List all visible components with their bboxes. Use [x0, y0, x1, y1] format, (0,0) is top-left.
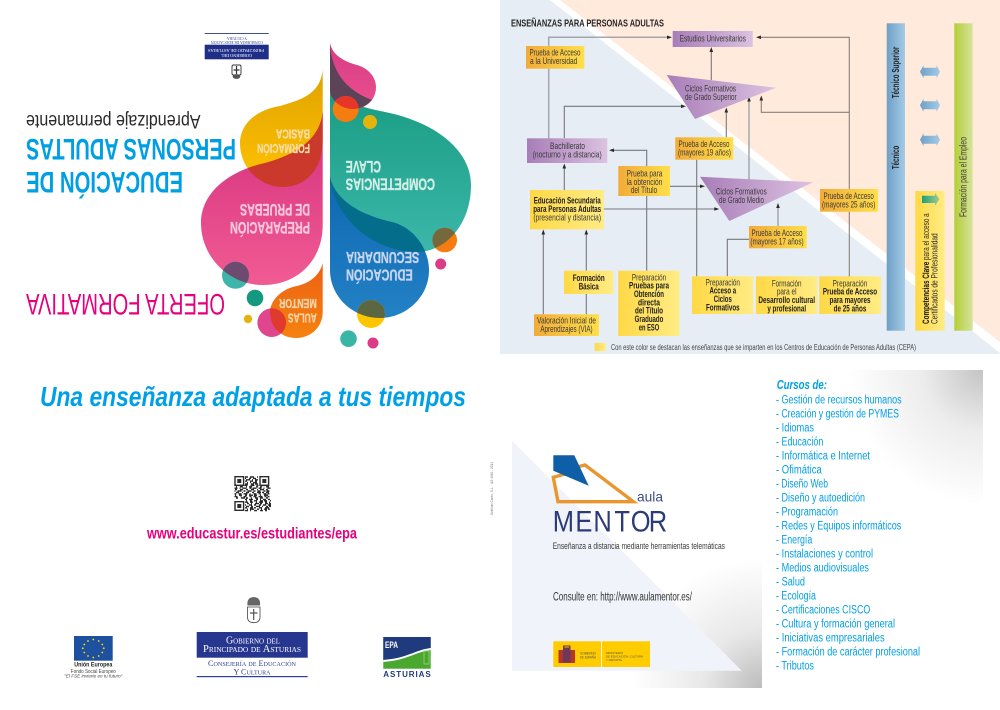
logo: gobierno del principado upside down: GOBIERNO DEL: [221, 53, 252, 58]
course list: - Certificaciones CISCO: [776, 604, 870, 616]
box: estudios universitarios: Estudios Universitarios: [680, 34, 746, 44]
drop: aulas mentor: AULAS: [288, 310, 317, 326]
course list: - Educación: [776, 437, 823, 449]
course list: - Idiomas: [776, 423, 814, 435]
drop: educación secundaria: [330, 177, 429, 318]
box: preparación prueba de acceso mayores 25: para mayores: [830, 295, 870, 306]
box: preparación prueba de acceso mayores 25: de 25 años: [834, 303, 866, 314]
box: formación básica: Básica: [579, 282, 599, 292]
logo: aula mentor: [553, 455, 667, 538]
box: educación secundaria: Educación Secundaria: [534, 196, 601, 207]
drop: educación secundaria: SECUNDARIA: [346, 248, 419, 265]
box: competencias clave: [915, 191, 945, 331]
course list: - Creación y gestión de PYMES: [776, 409, 899, 421]
box: formación para el desarrollo cultural: y profesional: [767, 303, 806, 314]
logo: unión europea: Fondo Social Europeo: [71, 669, 116, 675]
logo: aula mentor: MENTOR: [553, 505, 667, 538]
website: Consulte en: http://www.aulamentor.es/: [553, 592, 693, 604]
diagram background: [500, 0, 1000, 354]
shape: ciclos formativos de grado superior: Ciclos Formativos: [685, 84, 736, 95]
box: valoración inicial: Valoración Inicial de: [537, 316, 596, 326]
label: formación básica: BÁSICA: [276, 126, 310, 142]
box: formación básica: [564, 271, 613, 294]
legal deposit note: Gráficas Careo, S.L. · AS 4062 - 2014: [489, 461, 494, 515]
box: educación secundaria: (presencial y distancia): [533, 212, 601, 223]
label: formación básica: FORMACIÓN: [257, 141, 310, 156]
course list: - Diseño y autoedición: [776, 493, 865, 505]
logo: gobierno del principado upside down: CONSEJERÍA DE EDUCACIÓN: [211, 40, 263, 45]
panel: back cover: [40, 381, 466, 679]
bar: técnico: Técnico Superior: [891, 47, 902, 98]
logo: epa asturias: [383, 637, 431, 679]
drop: competencias clave: COMPETENCIAS: [346, 174, 435, 194]
course list: - Formación de carácter profesional: [776, 646, 920, 658]
grey corner shading bottom: [630, 558, 762, 688]
logo: gobierno del principado de asturias: Consejería de Educación: [208, 659, 297, 668]
box: preparación pruebas obtención directa: Graduado: [635, 314, 663, 325]
heading: enseñanzas: ENSEÑANZAS PARA PERSONAS ADULTAS: [511, 17, 664, 30]
box: prueba de acceso mayores 25: Prueba de Acceso: [824, 191, 874, 202]
box: prueba de acceso mayores 19: [675, 137, 733, 160]
box: preparación acceso a ciclos formativos: Acceso a: [709, 286, 737, 297]
box: preparación acceso a ciclos formativos: Formativos: [706, 302, 740, 313]
box: competencias clave: Competencias Clave para el acceso a: [921, 213, 932, 324]
box: prueba de acceso mayores 19: Prueba de Acceso: [678, 139, 730, 150]
course list: [776, 378, 920, 672]
box: preparación pruebas obtención directa: Preparación: [632, 272, 666, 283]
slogan: Una enseñanza adaptada a tus tiempos: [40, 381, 466, 412]
logo: gobierno de españa: Y DEPORTE: [606, 658, 622, 662]
logo: epa asturias: EPA: [385, 640, 398, 651]
box: valoración inicial: Aprendizajes (VIA): [540, 324, 593, 335]
icon: asturias crest: [247, 597, 260, 623]
drop: preparación de pruebas: DE PRUEBAS: [240, 200, 310, 219]
box: preparación prueba de acceso mayores 25: Preparación: [833, 278, 867, 289]
logo: gobierno de españa: GOBIERNO: [580, 652, 596, 656]
drop: competencias clave: [330, 88, 471, 252]
box: educación secundaria: [530, 190, 604, 229]
label: formación básica: [257, 126, 310, 156]
drop: small pink top: [330, 43, 376, 109]
box: prueba para la obtención del título: la obtención: [627, 177, 662, 188]
box: prueba de acceso mayores 19: (mayores 19 años): [678, 147, 731, 158]
logo: gobierno del principado de asturias: [197, 632, 308, 677]
grey corner shading top: [850, 370, 983, 503]
shape: ciclos formativos de grado superior: [667, 75, 776, 119]
course list: - Informática e Internet: [776, 451, 871, 463]
box: formación para el desarrollo cultural: para el: [777, 287, 797, 298]
logo: aula mentor: aula: [637, 489, 663, 505]
box: preparación prueba de acceso mayores 25: Prueba de Acceso: [823, 287, 877, 298]
box: preparación pruebas obtención directa: en ESO: [639, 322, 659, 333]
box: formación básica: Formación: [573, 273, 605, 284]
drop: preparación de pruebas: PREPARACIÓN: [230, 218, 310, 237]
box: preparación pruebas obtención directa: del Título: [635, 306, 663, 317]
course list: - Instalaciones y control: [776, 548, 873, 560]
box: prueba de acceso a la universidad: Prueba de Acceso: [530, 48, 580, 58]
box: valoración inicial: [534, 314, 599, 336]
box: prueba de acceso a la universidad: a la Universidad: [530, 56, 577, 67]
box: formación para el desarrollo cultural: Desarrollo cultural: [758, 295, 815, 306]
decorative circles: [222, 96, 457, 348]
course list: - Ofimática: [776, 465, 822, 477]
course list: - Tributos: [776, 660, 814, 672]
box: prueba de acceso mayores 25: [820, 189, 878, 212]
drop: competencias clave: CLAVE: [346, 157, 381, 176]
box: prueba de acceso mayores 17: Prueba de Acceso: [752, 228, 802, 239]
heading: educación de personas adultas: [26, 132, 236, 199]
logo: unión europea: "El FSE invierte en tu futuro": [64, 674, 123, 678]
drop: formación básica: [240, 70, 323, 187]
box: estudios universitarios: [673, 31, 753, 47]
panel: front cover (upside down): [26, 33, 471, 348]
bar: técnico: Técnico: [891, 146, 902, 169]
course list: - Cultura y formación general: [776, 618, 895, 630]
logo: gobierno de españa: MINISTERIO: [606, 651, 624, 655]
box: prueba para la obtención del título: del Título: [631, 185, 657, 196]
logo: epa asturias: ASTURIAS: [383, 670, 431, 679]
drop: aulas mentor: [270, 263, 323, 338]
course list: - Ecología: [776, 590, 816, 602]
box: preparación pruebas obtención directa: [618, 271, 679, 336]
panel: aula mentor: [489, 370, 983, 688]
drop: aulas mentor: MENTOR: [279, 296, 317, 311]
course list: - Medios audiovisuales: [776, 562, 869, 574]
box: bachillerato: [527, 138, 607, 163]
box: prueba de acceso mayores 25: (mayores 25 años): [822, 199, 875, 210]
box: preparación acceso a ciclos formativos: [692, 276, 753, 314]
shape: ciclos formativos de grado medio: de Grado Medio: [719, 195, 764, 206]
connector lines and arrows: [542, 36, 849, 314]
logo: unión europea: Unión Europea: [74, 662, 113, 668]
shape: ciclos formativos de grado superior: de Grado Superior: [685, 92, 737, 103]
box: preparación pruebas obtención directa: Obtención: [634, 289, 664, 300]
shape: ciclos formativos de grado medio: Ciclos Formativos: [716, 187, 767, 198]
box: competencias clave: Certificados de Profesionalidad: [930, 233, 941, 324]
box: formación para el desarrollo cultural: Formación: [772, 278, 802, 289]
drop: educación secundaria: EDUCACIÓN: [346, 266, 413, 284]
box: prueba de acceso mayores 17: [749, 226, 807, 248]
course list: - Diseño Web: [776, 479, 828, 491]
logo: unión europea: [64, 636, 123, 678]
course list: - Gestión de recursos humanos: [776, 395, 902, 407]
logo: gobierno de españa: [553, 641, 650, 667]
logo: gobierno del principado upside down: PRINCIPADO DE ASTURIAS: [207, 48, 264, 53]
drop: preparación de pruebas: [201, 112, 323, 285]
logo: gobierno de españa: DE EDUCACIÓN, CULTURA: [606, 654, 643, 658]
box: prueba para la obtención del título: Prueba para: [627, 168, 663, 179]
tagline: Enseñanza a distancia mediante herramientas telemáticas: [553, 541, 725, 551]
box: prueba para la obtención del título: [618, 166, 670, 196]
website url: www.educastur.es/estudiantes/epa: [146, 526, 357, 542]
box: preparación acceso a ciclos formativos: Preparación: [706, 277, 740, 288]
logo: gobierno del principado de asturias: Principado de Asturias: [203, 644, 301, 655]
panel: enseñanzas para personas adultas diagram: [500, 0, 1000, 354]
course list: - Salud: [776, 576, 805, 588]
course list heading: Cursos de:: [777, 378, 827, 392]
bar: formación para el empleo: [954, 23, 973, 331]
course list: - Redes y Equipos informáticos: [776, 521, 901, 533]
shape: ciclos formativos de grado medio: [700, 177, 813, 221]
box: prueba de acceso a la universidad: [526, 46, 584, 69]
box: preparación prueba de acceso mayores 25: [819, 276, 881, 314]
qr code: [234, 477, 271, 511]
course list: - Energía: [776, 535, 813, 547]
logo: gobierno del principado de asturias: Gobierno del: [226, 636, 280, 646]
logo: gobierno del principado de asturias: Y Cultura: [234, 667, 271, 676]
logo: gobierno de españa: DE ESPAÑA: [580, 654, 597, 660]
box: educación secundaria: para Personas Adultas: [533, 204, 601, 215]
bar: formación para el empleo: Formación para el Empleo: [958, 137, 970, 217]
bar: técnico: [887, 23, 905, 331]
box: formación para el desarrollo cultural: [756, 276, 817, 314]
course list: - Programación: [776, 507, 838, 519]
box: preparación pruebas obtención directa: directa: [638, 297, 661, 308]
light triangle background: [512, 441, 742, 671]
double arrows between bars: [920, 65, 940, 146]
course list: - Iniciativas empresariales: [776, 632, 885, 644]
box: preparación pruebas obtención directa: Pruebas para: [629, 281, 669, 292]
logo: gobierno del principado upside down: [205, 33, 269, 79]
logo: gobierno del principado upside down: Y CULTURA: [227, 36, 247, 40]
box: prueba de acceso mayores 17: (mayores 17 años): [750, 236, 804, 247]
box: bachillerato: Bachillerato: [550, 141, 585, 152]
box: bachillerato: (nocturno y a distancia): [533, 149, 602, 160]
box: preparación acceso a ciclos formativos: Ciclos: [714, 294, 732, 305]
